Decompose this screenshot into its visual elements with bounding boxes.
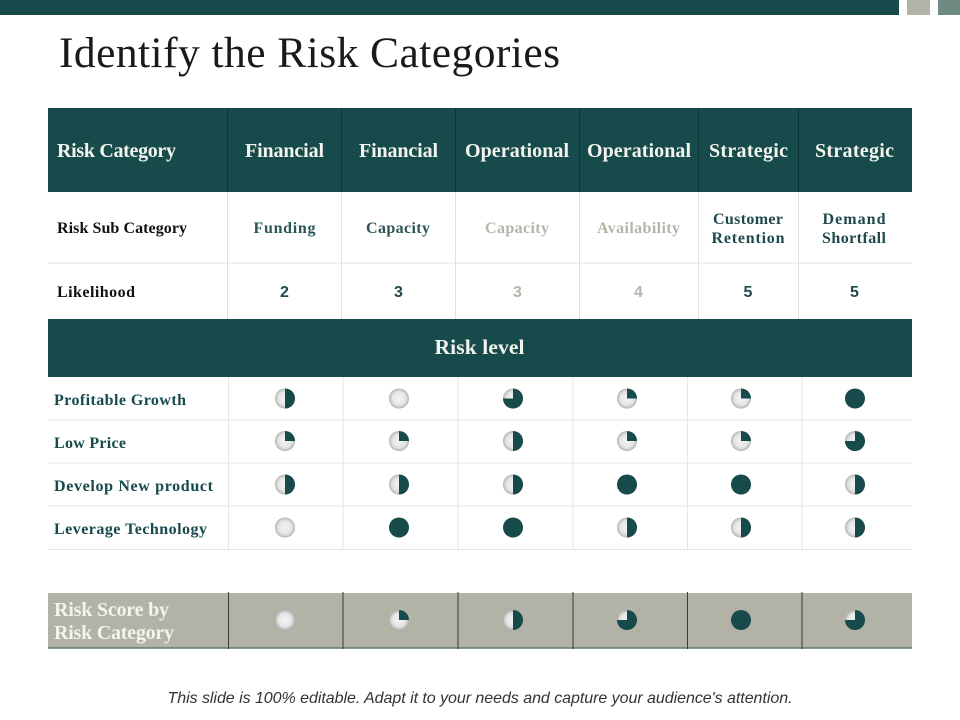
- header row: Strategic: [815, 140, 894, 162]
- sub category row: Funding: [254, 220, 316, 237]
- row: leverage technology: Leverage Technology: [54, 521, 207, 538]
- likelihood row: 3: [513, 284, 522, 301]
- likelihood row: 3: [394, 284, 403, 301]
- row: profitable growth: [54, 388, 865, 409]
- header row: Financial: [245, 140, 324, 162]
- sub category row: Capacity: [485, 220, 549, 237]
- title: Identify the Risk Categories: [59, 29, 560, 77]
- top accent bar: [0, 0, 960, 15]
- sub category row: Customer: [713, 211, 783, 228]
- risk score row: [48, 592, 912, 649]
- risk level banner: [48, 319, 912, 377]
- row: profitable growth: Profitable Growth: [54, 392, 186, 409]
- sub category row: Retention: [712, 230, 785, 247]
- row: low price: [54, 431, 865, 452]
- risk score row: Risk Category: [54, 622, 174, 644]
- likelihood row: [57, 284, 859, 301]
- risk level grid: [48, 377, 912, 550]
- likelihood row: 5: [850, 284, 859, 301]
- header row: [48, 108, 912, 192]
- likelihood row: Likelihood: [57, 284, 135, 301]
- sub category row: Demand: [822, 211, 886, 228]
- risk level banner: Risk level: [434, 335, 525, 359]
- header row: Strategic: [709, 140, 788, 162]
- header row: Operational: [587, 140, 691, 162]
- sub category row: Capacity: [366, 220, 430, 237]
- header row: Risk Category: [57, 140, 176, 162]
- likelihood row: 2: [280, 284, 289, 301]
- likelihood row: 4: [634, 284, 643, 301]
- risk score row: Risk Score by: [54, 599, 169, 621]
- header row: Operational: [465, 140, 569, 162]
- sub category row: Risk Sub Category: [57, 220, 187, 237]
- row: leverage technology: [54, 518, 865, 538]
- row: develop new product: [54, 474, 865, 495]
- row: develop new product: Develop New product: [54, 478, 214, 495]
- row: low price: Low Price: [54, 435, 126, 452]
- sub category row: Availability: [597, 220, 680, 237]
- panel: risk category table: [48, 108, 912, 649]
- likelihood row: 5: [744, 284, 753, 301]
- footer note: This slide is 100% editable. Adapt it to your needs and capture your audience's attention.: [168, 690, 792, 707]
- header row: Financial: [359, 140, 438, 162]
- sub category row: Shortfall: [822, 230, 887, 247]
- sub category row: [48, 192, 912, 319]
